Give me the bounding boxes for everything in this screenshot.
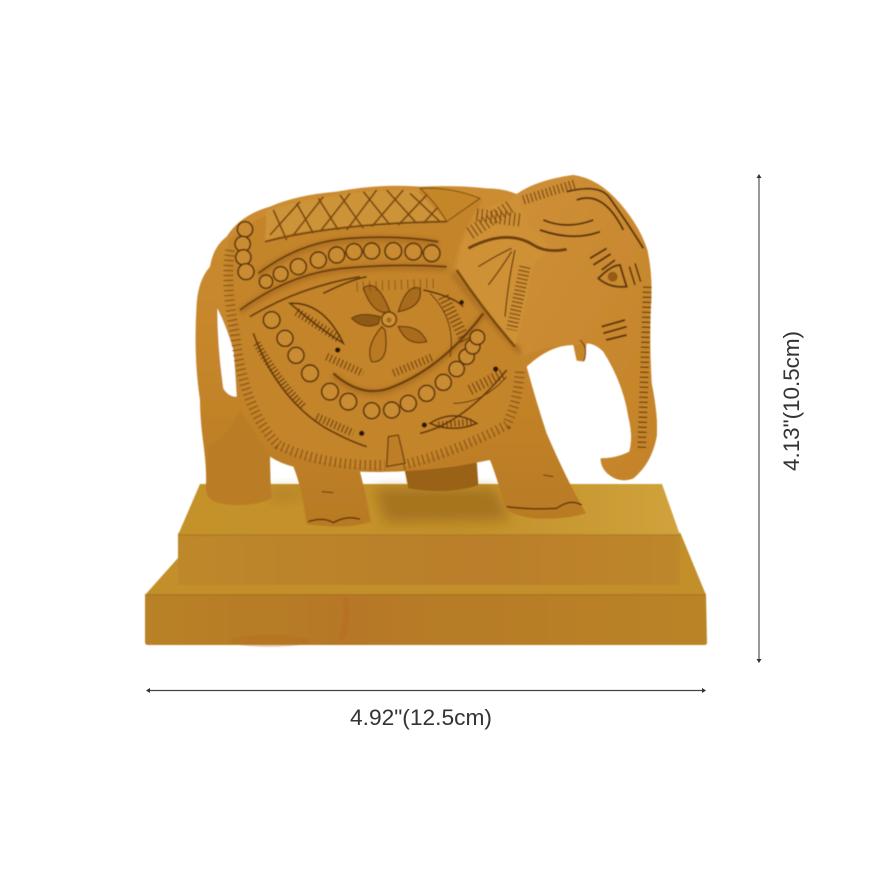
drilled holes <box>335 300 498 436</box>
far legs <box>403 460 478 491</box>
upper bead chain <box>235 222 440 288</box>
upper step top surface <box>178 484 680 535</box>
upper step front face <box>178 533 680 585</box>
wooden base <box>145 484 707 647</box>
rear leg shading <box>206 410 272 504</box>
ear <box>457 200 567 347</box>
relief shadows <box>240 239 520 393</box>
height dimension arrow <box>756 174 762 663</box>
height label: 4.13"(10.5cm) <box>779 331 804 471</box>
blanket fringe hatching <box>228 250 520 465</box>
leaf engravings <box>257 277 507 433</box>
central flower motif <box>352 285 427 362</box>
base stain marks <box>146 534 705 647</box>
ridge lines <box>240 237 507 447</box>
head carving <box>523 183 647 450</box>
blanket <box>227 188 523 468</box>
shoulder panel <box>420 188 480 222</box>
elephant silhouette <box>196 175 657 527</box>
width label: 4.92"(12.5cm) <box>350 705 492 730</box>
carved elephant figure <box>196 175 657 527</box>
leg toenails <box>308 475 582 523</box>
blanket body <box>227 191 523 468</box>
lower bead chain <box>263 312 485 419</box>
crosshatch top panel <box>265 190 447 242</box>
width dimension arrow <box>146 688 706 693</box>
gap between tail and body <box>217 308 237 397</box>
cast shadow under elephant <box>270 488 510 522</box>
blanket centre tassel <box>387 435 405 467</box>
lower step front face <box>145 594 707 645</box>
lower step top surface <box>145 532 706 595</box>
head and trunk highlight <box>473 175 657 480</box>
